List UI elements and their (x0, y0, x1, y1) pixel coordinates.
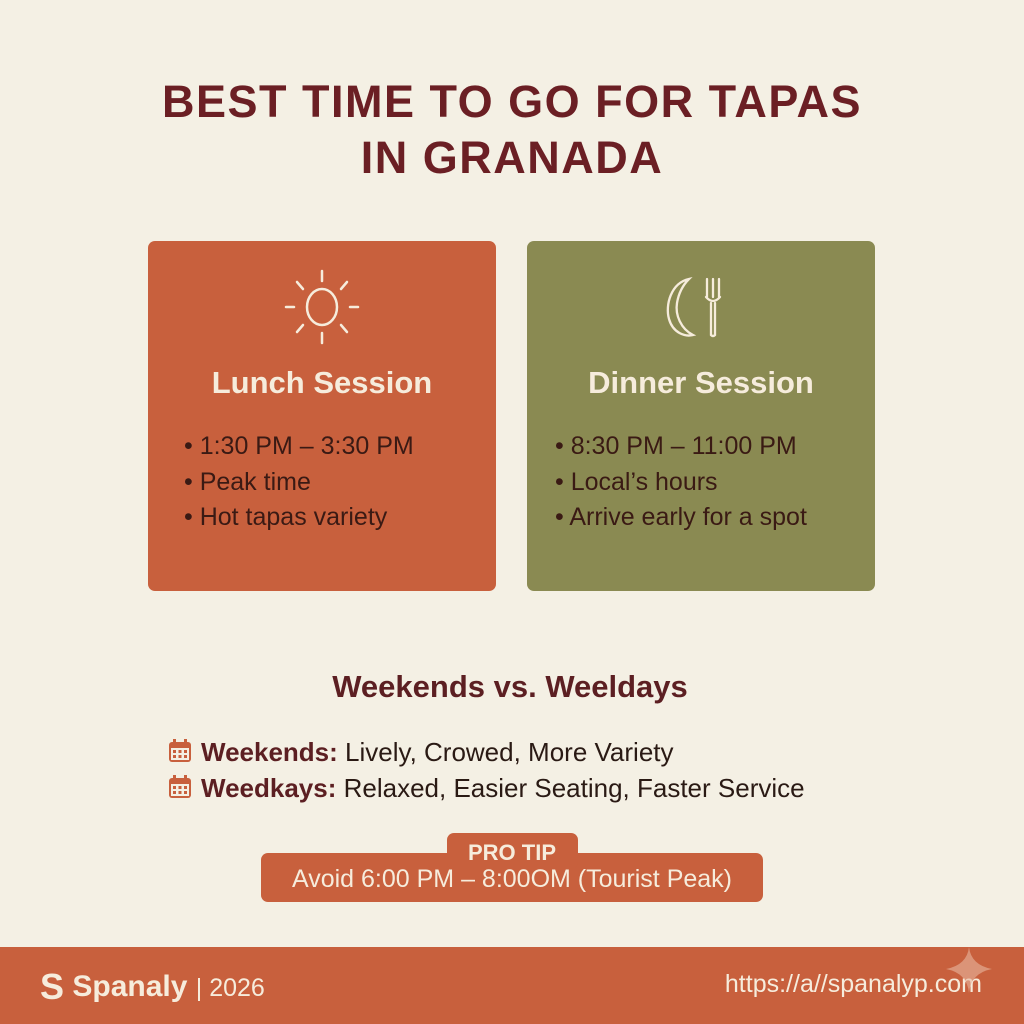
footer (0, 947, 1024, 1024)
icon: sparkle (946, 948, 992, 992)
logo: S Spanaly | 2026 (40, 966, 265, 1007)
text block: weekends comparison (169, 737, 805, 803)
panel: dinner session (527, 241, 875, 591)
list: dinner (555, 432, 807, 531)
text: avoid time: Avoid 6:00 PM – 8:00OM (Tourist Peak) (292, 865, 732, 893)
callout: pro tip (261, 833, 763, 902)
item: weekends: Weekends: Lively, Crowed, More Variety (201, 737, 674, 767)
url: https://a//spanalyp.com (725, 970, 982, 998)
list: dinner: • 8:30 PM – 11:00 PM (555, 432, 797, 460)
list: dinner: • Arrive early for a spot (555, 503, 807, 531)
item: weekdays: Weedkays: Relaxed, Easier Seating, Faster Service (201, 773, 805, 803)
list: lunch: • 1:30 PM – 3:30 PM (184, 432, 414, 460)
list: lunch: • Peak time (184, 468, 311, 496)
title: IN GRANADA (361, 132, 663, 183)
heading: dinner: Dinner Session (588, 365, 814, 400)
list: lunch: • Hot tapas variety (184, 503, 387, 531)
heading: lunch: Lunch Session (212, 365, 432, 400)
list: lunch (184, 432, 414, 531)
title: BEST TIME TO GO FOR TAPAS (162, 76, 862, 127)
icon: moon and fork (666, 277, 722, 338)
title (162, 76, 862, 183)
icon: sun (284, 270, 360, 344)
panel: lunch session (148, 241, 496, 591)
label: pro tip: PRO TIP (468, 840, 556, 865)
list: dinner: • Local’s hours (555, 468, 718, 496)
heading: weekends vs weekdays: Weekends vs. Weeldays (332, 669, 688, 704)
